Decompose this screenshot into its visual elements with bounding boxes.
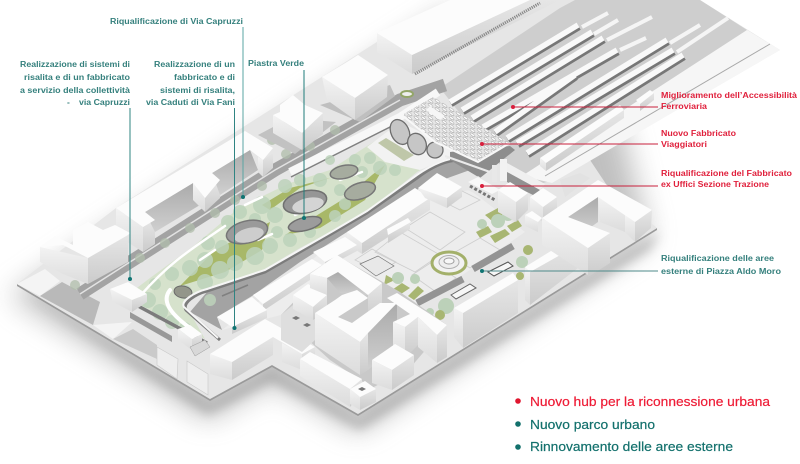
oval void	[224, 216, 270, 248]
callout: Piastra Verde	[248, 58, 306, 220]
building: large central block	[315, 290, 397, 375]
piazza gardens	[384, 208, 533, 320]
callout: Nuovo Fabbricato Viaggiatori: Nuovo Fabbricato	[661, 128, 736, 138]
callout: Accessibilità Ferroviaria: Miglioramento dell’Accessibilità	[661, 90, 797, 100]
road below the deck	[190, 160, 470, 330]
callout: Accessibilità Ferroviaria	[511, 90, 797, 111]
piazza floor	[222, 190, 525, 330]
oval void	[287, 214, 323, 234]
building: row at south	[300, 352, 376, 410]
legend item: hub: Nuovo hub per la riconnessione urbana	[530, 394, 771, 409]
building: cube	[372, 344, 414, 390]
building: corner L	[210, 319, 315, 380]
callout: Piazza Aldo Moro	[480, 253, 781, 276]
callout: Piastra Verde: Piastra Verde	[248, 58, 304, 68]
oval void	[281, 187, 329, 217]
callout: sistemi di risalita via Capruzzi: via Capruzzi	[79, 97, 130, 107]
railway platforms	[450, 13, 728, 155]
building: block near Piastra Verde	[258, 95, 336, 154]
oval void	[173, 285, 193, 299]
wall buildings at south corner	[157, 347, 208, 395]
building: C block	[310, 255, 382, 320]
building: large C block east	[542, 180, 652, 277]
railway yard floor	[440, 0, 780, 190]
ground shadow	[10, 10, 660, 432]
legend	[515, 394, 771, 454]
building: wall block east	[525, 238, 578, 305]
callout: sistemi di risalita via Capruzzi	[20, 59, 132, 281]
cluster courtyard floor	[281, 256, 447, 388]
new passenger building canopy	[402, 97, 515, 178]
building: wall block on piazza	[454, 273, 518, 348]
callout: Nuovo Fabbricato Viaggiatori	[480, 128, 736, 149]
callout: fabbricato via Caduti di Via Fani	[146, 59, 236, 330]
callout: Riqualificazione di Via Capruzzi: Riqualificazione di Via Capruzzi	[110, 16, 243, 26]
bus	[451, 284, 476, 299]
panel: Piastra Verde park deck	[125, 125, 460, 343]
callout: Fabbricato ex Uffici: ex Uffici Sezione Trazione	[661, 179, 769, 189]
callout: fabbricato via Caduti di Via Fani: fabbricato e di	[174, 72, 235, 82]
tree canopy	[140, 152, 401, 334]
callout: Piazza Aldo Moro: esterne di Piazza Aldo Moro	[661, 266, 781, 276]
legend item: park: Nuovo parco urbano	[530, 417, 655, 432]
callout: fabbricato via Caduti di Via Fani: sistemi di risalita,	[160, 85, 235, 95]
oval void	[342, 178, 378, 204]
callout: sistemi di risalita via Capruzzi: Realizzazione di sistemi di	[20, 59, 130, 69]
callout: Nuovo Fabbricato Viaggiatori: Viaggiatori	[661, 139, 707, 149]
ex Uffici building	[468, 176, 500, 205]
towers	[492, 159, 545, 196]
deck surface	[125, 125, 455, 339]
building: T block	[387, 293, 447, 363]
arches at the north end of the deck	[367, 116, 462, 170]
white paths	[140, 172, 362, 328]
lawn	[180, 165, 385, 286]
building: small cube	[293, 284, 327, 320]
callout: fabbricato via Caduti di Via Fani: Realizzazione di un	[154, 59, 235, 69]
bus lanes	[417, 246, 513, 303]
callout: sistemi di risalita via Capruzzi: -	[67, 97, 70, 107]
buildings next to ex Uffici	[498, 182, 557, 232]
callout: fabbricato via Caduti di Via Fani: via Caduti di Via Fani	[146, 97, 235, 107]
building: lower left block	[40, 222, 130, 284]
platform service blocks	[540, 90, 654, 171]
callout: sistemi di risalita via Capruzzi: risalita e di un fabbricato	[24, 72, 130, 82]
callout: Fabbricato ex Uffici: Riqualificazione del Fabbricato	[661, 168, 792, 178]
deck-end pavilions	[110, 282, 210, 356]
via Capruzzi road	[80, 85, 445, 294]
deck edge	[125, 158, 460, 343]
callout: Piazza Aldo Moro: Riqualificazione delle aree	[661, 253, 774, 263]
street trees along via Capruzzi	[70, 110, 365, 290]
callout: sistemi di risalita via Capruzzi: a servizio della collettività	[20, 85, 130, 95]
callout: Riqualificazione di Via Capruzzi	[110, 16, 245, 199]
legend item: external areas: Rinnovamento delle aree esterne	[530, 439, 733, 454]
building: upper cluster	[320, 55, 395, 122]
circular fountain	[432, 252, 466, 274]
stairs	[560, 173, 590, 197]
building: long block on via Capruzzi	[116, 131, 273, 252]
long low buildings along the piazza	[217, 173, 462, 334]
building: court block	[281, 305, 315, 352]
callout: Accessibilità Ferroviaria: Ferroviaria	[661, 101, 707, 111]
callout: Fabbricato ex Uffici	[480, 168, 792, 189]
bus	[488, 262, 513, 276]
oval void	[329, 163, 359, 181]
big building top	[377, 0, 560, 74]
